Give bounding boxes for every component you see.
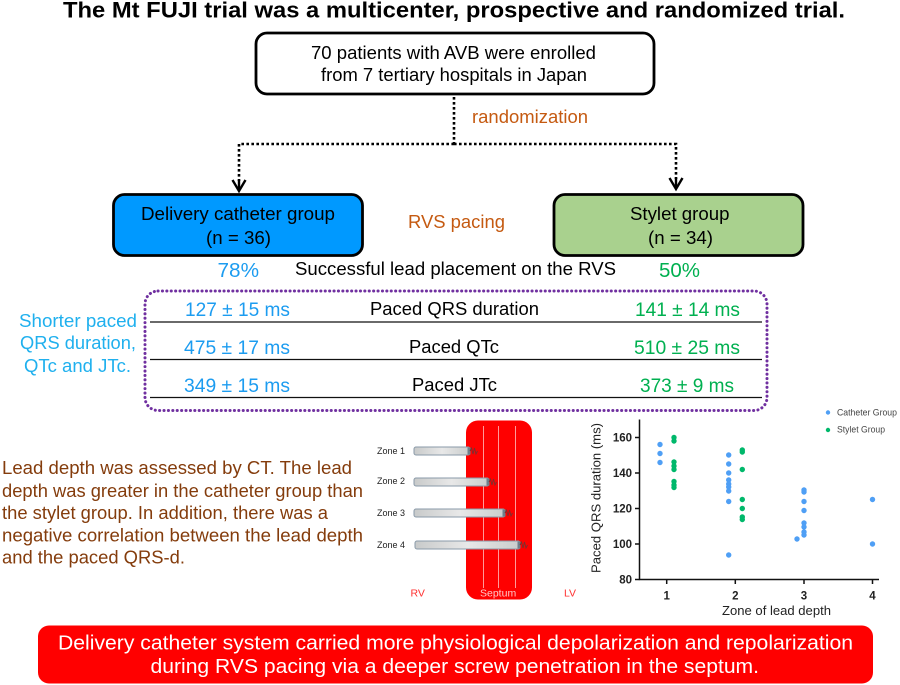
scatter chart [588, 408, 897, 618]
x-axis tick labels: 4 [869, 590, 876, 602]
stylet success rate: 50% [659, 259, 700, 282]
region labels: Septum [480, 588, 516, 600]
zone 3 lead [377, 508, 512, 518]
x-axis tick labels: 2 [732, 590, 739, 602]
conclusion banner: Delivery catheter system carried more physiological depolarization and repolarization [58, 632, 853, 654]
row: paced QTc: Paced QTc [409, 336, 499, 357]
enrollment box: from 7 tertiary hospitals in Japan [321, 64, 587, 85]
side note: shorter durations: QTc and JTc. [24, 355, 131, 376]
catheter group points [657, 442, 875, 558]
randomization label: randomization [472, 106, 588, 127]
stylet group box: Stylet group [630, 203, 730, 224]
x-axis tick labels: 1 [663, 590, 670, 602]
region labels: LV [564, 588, 576, 600]
chart legend [826, 408, 897, 434]
conclusion banner [38, 626, 873, 684]
y-axis title: Paced QRS duration (ms) [588, 423, 604, 573]
row: paced QTc: 475 ± 17 ms [184, 338, 290, 359]
row: paced JTc [184, 374, 734, 397]
x-axis tick labels [663, 590, 876, 602]
chart legend: Catheter Group [837, 408, 897, 418]
y-axis tick labels: 100 [613, 539, 632, 551]
side note: shorter durations [19, 310, 137, 376]
stylet group points [671, 435, 745, 522]
row: paced QRS duration: Paced QRS duration [370, 298, 539, 319]
stylet group box [554, 194, 803, 256]
axes [635, 420, 879, 584]
side note: shorter durations: QRS duration, [20, 332, 136, 353]
zone 1 lead [377, 446, 478, 456]
row: paced JTc: 349 ± 15 ms [184, 376, 290, 397]
lead depth description: and the paced QRS-d. [2, 546, 185, 568]
septum [466, 420, 532, 600]
row: paced QTc: 510 ± 25 ms [634, 338, 740, 359]
lead depth description [2, 457, 363, 568]
enrollment box [256, 33, 654, 94]
enrollment box: 70 patients with AVB were enrolled [311, 42, 596, 63]
row: paced QTc [184, 336, 740, 359]
zone 2 lead [377, 476, 496, 486]
region labels: RV [410, 588, 425, 600]
delivery catheter group box: (n = 36) [206, 227, 271, 248]
conclusion banner: during RVS pacing via a deeper screw penetration in the septum. [150, 656, 759, 678]
results panel [145, 291, 767, 410]
zone 2 lead: Zone 2 [377, 476, 405, 486]
catheter success rate: 78% [218, 259, 259, 282]
y-axis tick labels: 80 [619, 574, 632, 586]
row: paced JTc: Paced JTc [412, 374, 497, 395]
successful lead placement label: Successful lead placement on the RVS [295, 258, 616, 279]
chart legend: Stylet Group [837, 424, 885, 434]
x-axis tick labels: 3 [801, 590, 807, 602]
lead depth description: the stylet group. In addition, there was a [2, 502, 329, 523]
lead depth description: Lead depth was assessed by CT. The lead [2, 457, 352, 478]
row: paced QRS duration: 127 ± 15 ms [185, 300, 290, 321]
RVS pacing label: RVS pacing [408, 211, 505, 232]
x-axis title: Zone of lead depth [722, 603, 831, 618]
stylet group box: (n = 34) [648, 227, 713, 248]
row: paced QRS duration [185, 298, 740, 321]
y-axis tick labels: 140 [613, 468, 632, 480]
lead depth diagram [377, 420, 576, 600]
randomization flow arrows [232, 97, 682, 191]
zone 1 lead: Zone 1 [377, 446, 405, 456]
y-axis tick labels: 160 [613, 432, 632, 444]
y-axis tick labels [613, 432, 632, 586]
y-axis tick labels: 120 [613, 504, 632, 516]
zone 4 lead [377, 540, 528, 550]
row: paced JTc: 373 ± 9 ms [640, 376, 734, 397]
lead depth description: negative correlation between the lead depth [2, 524, 363, 546]
row: paced QRS duration: 141 ± 14 ms [635, 300, 740, 321]
region labels [410, 588, 576, 600]
delivery catheter group box [114, 194, 362, 256]
delivery catheter group box: Delivery catheter group [141, 203, 335, 224]
zone 4 lead: Zone 4 [377, 540, 405, 550]
side note: shorter durations: Shorter paced [19, 310, 137, 331]
lead depth description: depth was greater in the catheter group than [2, 480, 363, 501]
zone 3 lead: Zone 3 [377, 508, 405, 518]
